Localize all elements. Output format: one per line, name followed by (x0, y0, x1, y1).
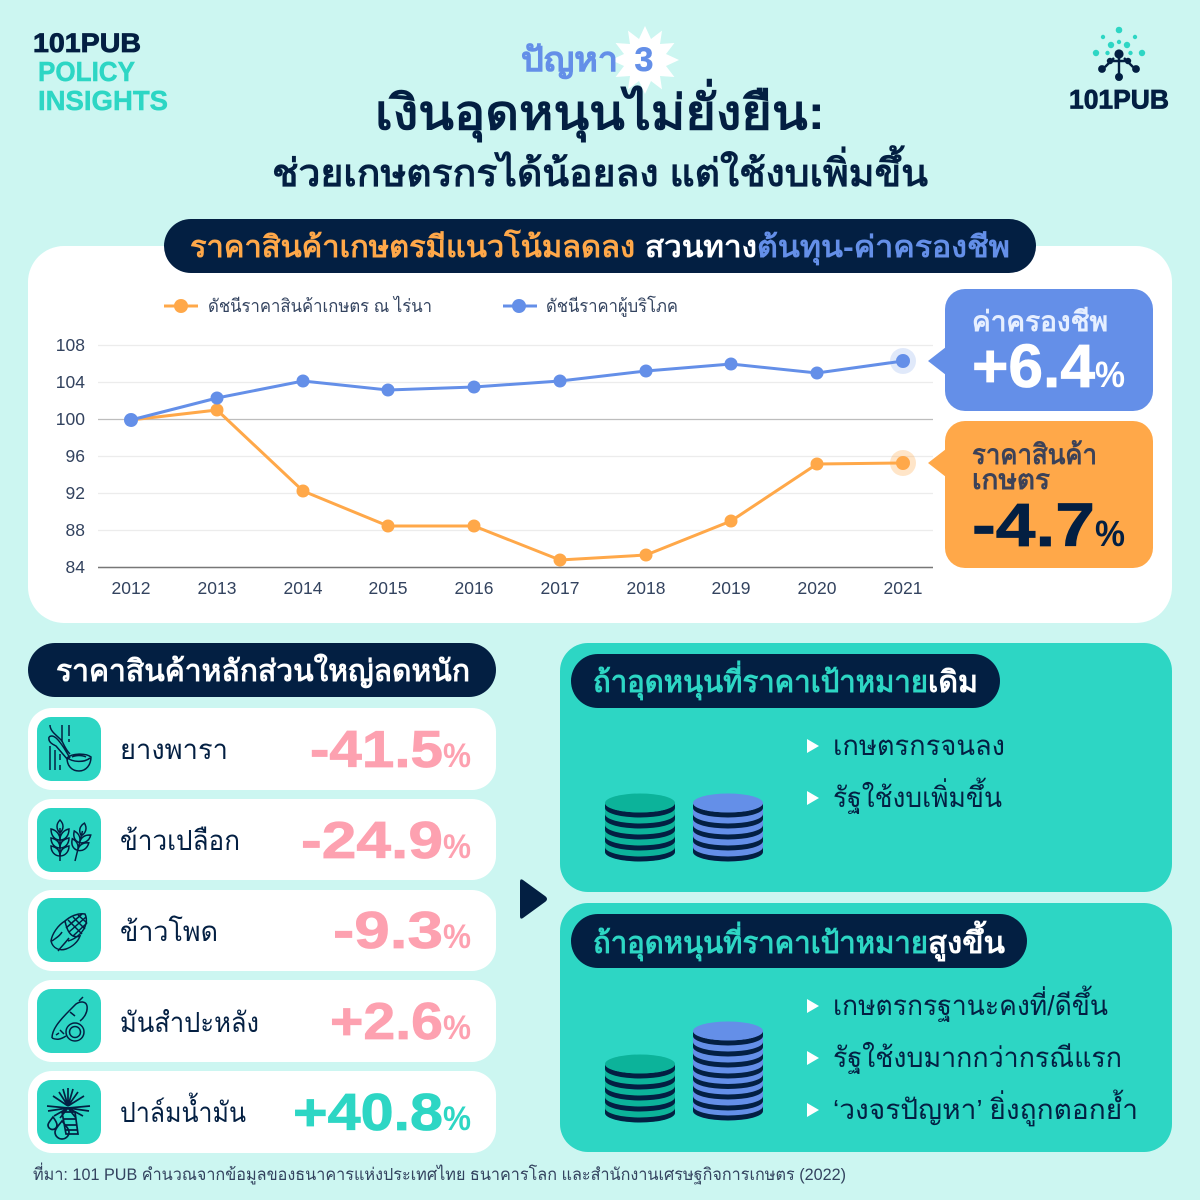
coin stack: farmers (605, 794, 675, 862)
legend: ดัชนีราคาผู้บริโภค (546, 295, 678, 317)
coin stack: budget (693, 794, 763, 862)
row: maize: ข้าวโพด (120, 915, 218, 947)
x axis labels: 2017 (541, 578, 579, 598)
panel heading (571, 654, 1000, 708)
row: maize: % (443, 918, 471, 956)
y axis labels: 96 (66, 446, 85, 466)
series: farm price index (131, 404, 916, 566)
callout: farm prices (928, 421, 1153, 568)
row: rubber (28, 708, 496, 790)
callout: cost of living: ค่าครองชีพ (972, 306, 1108, 337)
callout: cost of living (928, 289, 1153, 411)
bullet list (807, 730, 1005, 814)
x axis labels: 2021 (884, 578, 922, 598)
x axis labels: 2016 (455, 578, 493, 598)
row: cassava: มันสำปะหลัง (120, 1007, 259, 1038)
row: maize (28, 890, 496, 971)
row: paddy rice: -24.9 (301, 812, 443, 870)
callout: cost of living: +6.4 (972, 332, 1095, 400)
icon: rubber tree and cup (49, 725, 91, 771)
callout: farm prices: % (1095, 513, 1125, 554)
bullet list: เกษตรกรจนลง (833, 730, 1005, 761)
icon: rice stalks (51, 820, 93, 863)
x axis labels: 2012 (112, 578, 150, 598)
coin stack: budget (693, 1022, 763, 1120)
x axis labels: 2019 (712, 578, 750, 598)
y axis labels: 104 (56, 372, 85, 392)
callout: farm prices: เกษตร (972, 464, 1050, 495)
heading: problem number with starburst: ปัญหา (521, 41, 618, 80)
row: paddy rice (28, 799, 496, 880)
row: rubber: % (443, 737, 471, 775)
row: maize: -9.3 (333, 902, 443, 960)
heading: problem number with starburst: 3 (635, 41, 653, 79)
heading pill: main commodities (28, 643, 496, 697)
row: cassava: +2.6 (330, 993, 443, 1051)
panel heading: สูงขึ้น (928, 920, 1006, 962)
x axis labels: 2020 (798, 578, 837, 598)
panel heading: เดิม (928, 666, 978, 699)
chart heading pill: ราคาสินค้าเกษตรมีแนวโน้มลดลง (190, 228, 635, 264)
x axis labels: 2015 (369, 578, 407, 598)
x axis labels: 2014 (284, 578, 323, 598)
panel: original target price (560, 643, 1172, 892)
chart heading pill: ต้นทุน-ค่าครองชีพ (757, 231, 1010, 266)
chart heading pill: สวนทาง (645, 231, 757, 264)
icon: oil palm and drops (47, 1088, 90, 1139)
logo: 101PUB Policy Insights (33, 28, 168, 116)
panel heading: ถ้าอุดหนุนที่ราคาเป้าหมาย (593, 660, 928, 701)
series: consumer price index (124, 348, 916, 427)
legend: ดัชนีราคาสินค้าเกษตร ณ ไร่นา (208, 295, 432, 316)
callout: cost of living: % (1095, 354, 1125, 395)
source note: ที่มา: 101 PUB คำนวณจากข้อมูลของธนาคารแห่งประเทศไทย ธนาคารโลก และสำนักงานเศรษฐกิจการเกษตร (2022) (33, 1162, 846, 1185)
heading pill: main commodities: ราคาสินค้าหลักส่วนใหญ่ลดหนัก (56, 653, 470, 689)
x axis labels (112, 578, 922, 598)
y axis labels (56, 335, 85, 577)
panel: higher target price (560, 903, 1172, 1152)
heading: problem number with starburst (521, 26, 679, 94)
row: oil palm: ปาล์มน้ำมัน (120, 1092, 246, 1128)
panel: line chart (28, 246, 1172, 623)
row: paddy rice: % (443, 828, 471, 866)
logo: 101PUB network mark (1069, 27, 1169, 115)
y axis labels: 100 (56, 409, 85, 429)
panel heading: ถ้าอุดหนุนที่ราคาเป้าหมาย (593, 921, 928, 962)
chart heading pill (164, 219, 1036, 273)
legend (164, 295, 678, 317)
logo: 101PUB Policy Insights: POLICY (38, 56, 135, 87)
bullet list: รัฐใช้งบมากกว่ากรณีแรก (833, 1041, 1122, 1074)
y axis labels: 84 (66, 557, 85, 577)
panel heading (571, 914, 1027, 968)
bullet list: ‘วงจรปัญหา’ ยิ่งถูกตอกย้ำ (833, 1089, 1138, 1127)
bullet list (807, 985, 1138, 1127)
logo: 101PUB Policy Insights: INSIGHTS (38, 85, 168, 116)
icon: corn cob (51, 914, 87, 951)
y axis labels: 108 (56, 335, 85, 355)
y axis labels: 92 (66, 483, 85, 503)
bullet list: รัฐใช้งบเพิ่มขึ้น (833, 777, 1002, 814)
row: oil palm (28, 1071, 496, 1153)
row: rubber: ยางพารา (120, 734, 228, 765)
arrow (520, 879, 547, 919)
logo: 101PUB Policy Insights: 101PUB (33, 28, 141, 58)
row: oil palm: +40.8 (293, 1084, 443, 1142)
icon: cassava root (52, 997, 87, 1041)
coin stack: farmers (605, 1054, 675, 1122)
x axis labels: 2018 (627, 578, 665, 598)
y axis labels: 88 (66, 520, 85, 540)
row: cassava (28, 980, 496, 1062)
subtitle: ช่วยเกษตรกรได้น้อยลง แต่ใช้งบเพิ่มขึ้น (272, 145, 928, 195)
row: cassava: % (443, 1009, 471, 1047)
row: rubber: -41.5 (310, 721, 443, 779)
bullet list: เกษตรกรฐานะคงที่/ดีขึ้น (833, 985, 1108, 1022)
callout: farm prices: ราคาสินค้า (972, 439, 1097, 470)
title: เงินอุดหนุนไม่ยั่งยืน: (375, 78, 825, 143)
row: paddy rice: ข้าวเปลือก (120, 825, 240, 856)
logo: 101PUB network mark: 101PUB (1069, 84, 1169, 114)
callout: farm prices: -4.7 (972, 491, 1095, 559)
row: oil palm: % (443, 1100, 471, 1138)
x axis labels: 2013 (198, 578, 236, 598)
